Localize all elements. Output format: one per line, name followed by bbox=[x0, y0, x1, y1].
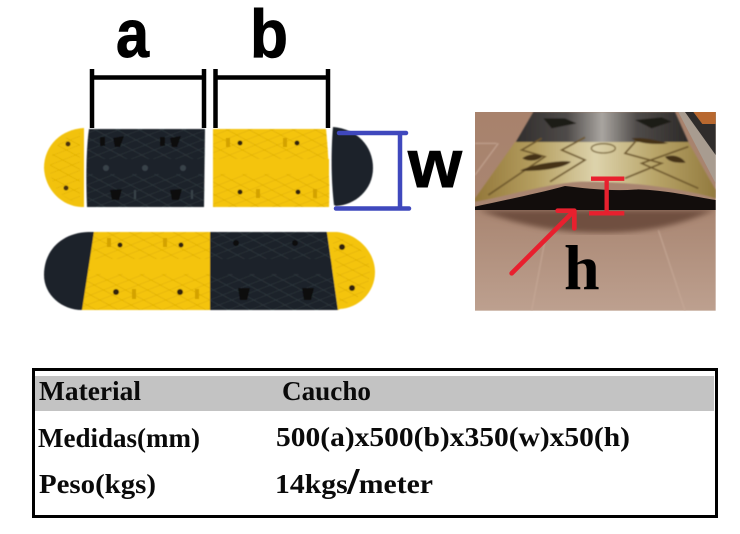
yellow centre section b bbox=[213, 129, 329, 207]
label: w: w bbox=[407, 126, 463, 202]
row: peso: Peso(kgs) bbox=[39, 469, 156, 499]
left yellow end cap bbox=[44, 128, 84, 207]
yellow rubber section bbox=[475, 142, 716, 202]
separated speed bump pieces bbox=[44, 127, 373, 207]
dimension bracket w bbox=[336, 133, 409, 208]
left black end cap bbox=[44, 232, 94, 310]
row: peso bbox=[39, 461, 433, 501]
right black end cap bbox=[332, 127, 373, 206]
row: material: Material bbox=[39, 376, 141, 406]
row: medidas: Medidas(mm) bbox=[38, 423, 200, 453]
black centre section a bbox=[86, 129, 205, 207]
yellow section bbox=[82, 232, 210, 310]
row: medidas bbox=[38, 422, 630, 453]
height marker bbox=[589, 179, 624, 213]
table frame bbox=[34, 370, 716, 516]
floor shadow bbox=[478, 210, 715, 233]
black section bbox=[210, 232, 338, 310]
right yellow end cap bbox=[327, 232, 375, 310]
dimension bracket a bbox=[92, 69, 204, 128]
assembled speed bump bbox=[44, 232, 375, 310]
photo: speed bump on wooden floor bbox=[475, 112, 716, 311]
header row bbox=[35, 376, 714, 411]
row: peso: 14kgs/meter bbox=[275, 461, 433, 501]
label: h: h bbox=[564, 232, 600, 303]
arrow to height bbox=[512, 211, 574, 273]
row: material: Caucho bbox=[282, 376, 371, 406]
black rubber section bbox=[515, 112, 689, 143]
specification table bbox=[34, 370, 716, 516]
dark underside bbox=[475, 186, 716, 210]
dimension bracket b bbox=[216, 69, 328, 128]
row: material bbox=[39, 376, 371, 406]
row: medidas: 500(a)x500(b)x350(w)x50(h) bbox=[276, 422, 630, 452]
wooden floor bbox=[475, 112, 716, 311]
